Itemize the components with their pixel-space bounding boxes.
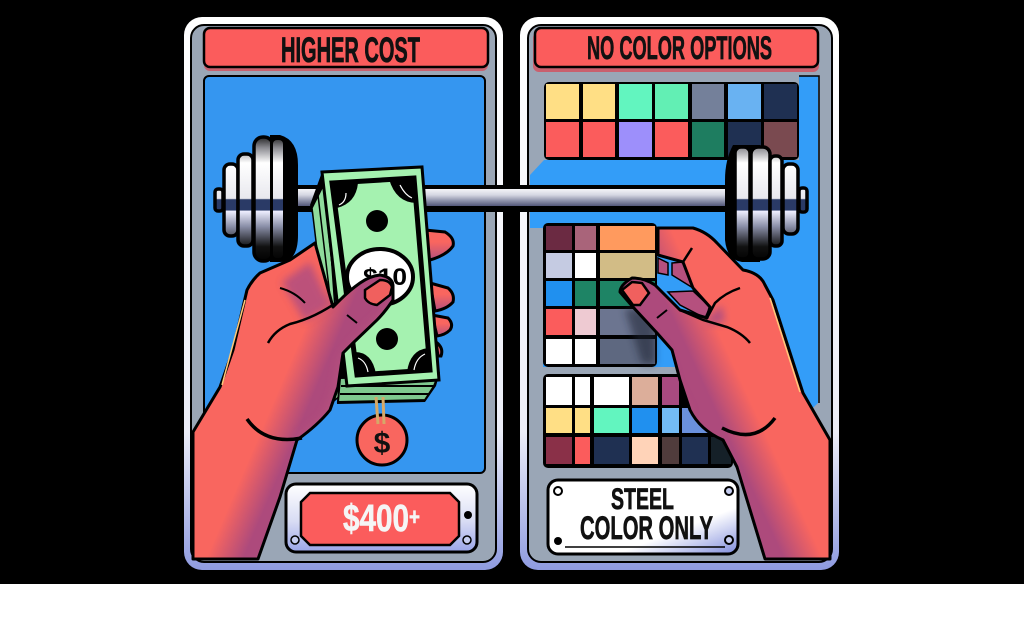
panel: no color options	[520, 17, 839, 570]
right weight plates	[725, 145, 760, 262]
right hand holding swatches	[620, 228, 830, 559]
steel color plaque: COLOR ONLY	[580, 510, 713, 546]
price plaque	[286, 484, 477, 552]
stack of dollar bills: $10	[363, 264, 407, 291]
dollar price tag	[357, 397, 407, 465]
bar	[285, 185, 740, 212]
heading: higher cost: HIGHER COST	[281, 31, 420, 70]
blue background	[204, 76, 485, 473]
palette: top swatches	[544, 82, 799, 160]
left weight plates	[215, 137, 273, 261]
stack of dollar bills	[310, 167, 440, 404]
panel: higher cost	[184, 17, 503, 570]
palette: lower swatches	[543, 374, 733, 468]
steel color plaque: STEEL	[611, 483, 674, 516]
blue background	[530, 76, 818, 440]
gray strip left of the lower palettes	[530, 228, 543, 368]
barbell	[215, 135, 807, 262]
heading: no color options: NO COLOR OPTIONS	[587, 30, 772, 66]
bill center medallion	[347, 249, 413, 305]
left hand holding bills	[193, 243, 393, 559]
left fingers behind bills	[425, 230, 453, 356]
purple fingers behind	[658, 258, 710, 318]
heading: no color options	[533, 28, 819, 72]
heading: higher cost	[204, 28, 488, 71]
right thumb nail	[622, 282, 649, 305]
steel color plaque	[548, 480, 738, 554]
dollar price tag: $	[374, 427, 391, 460]
white bottom strip	[0, 584, 1024, 643]
front bill	[322, 167, 439, 386]
price plaque: $400	[343, 498, 428, 540]
palette: middle swatches	[543, 223, 657, 367]
price plaque: +	[409, 504, 420, 531]
left thumb nail	[365, 280, 392, 305]
